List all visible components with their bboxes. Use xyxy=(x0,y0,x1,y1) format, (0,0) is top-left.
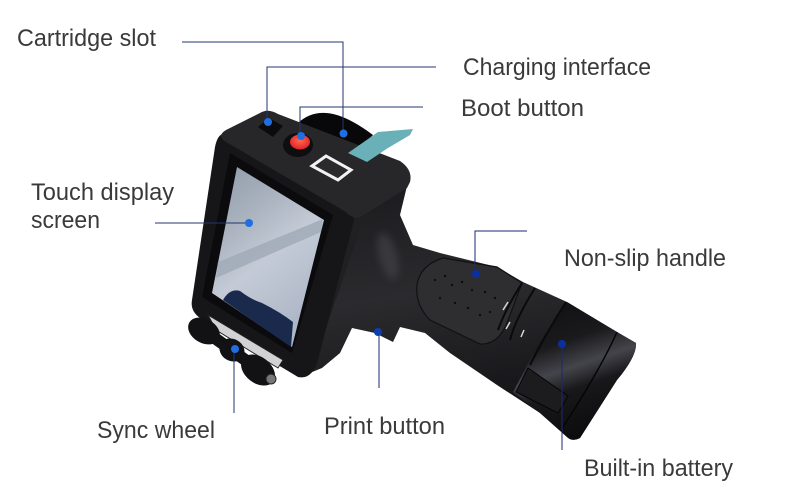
cartridge cover xyxy=(298,113,373,156)
battery xyxy=(513,302,636,440)
leader: touch display screen xyxy=(155,219,253,227)
label: built-in battery: Built-in battery xyxy=(584,455,733,482)
leader: print button xyxy=(374,328,382,388)
label: non-slip handle: Non-slip handle xyxy=(564,245,726,272)
leader: cartridge slot xyxy=(182,42,348,138)
leader: charging interface xyxy=(264,67,436,126)
label: touch display screen: Touch display xyxy=(31,179,174,206)
grip highlight xyxy=(373,230,403,282)
label: print button: Print button xyxy=(324,413,445,440)
label: charging interface: Charging interface xyxy=(463,54,651,81)
label: cartridge slot: Cartridge slot xyxy=(17,25,156,52)
blue cartridge tab xyxy=(348,129,413,162)
ring highlights xyxy=(503,302,524,337)
handle rings xyxy=(498,283,566,365)
screen bezel xyxy=(202,153,333,353)
head side strip xyxy=(300,217,362,377)
sync wheel bracket xyxy=(208,315,283,368)
label: sync wheel: Sync wheel xyxy=(97,417,215,444)
leader: sync wheel xyxy=(231,345,239,413)
boot button base xyxy=(283,133,313,157)
battery ring line xyxy=(563,332,617,427)
device illustration xyxy=(183,111,636,440)
screen dark reflection xyxy=(223,290,293,347)
head front face xyxy=(192,134,354,377)
battery latch xyxy=(516,368,568,413)
screen xyxy=(212,167,324,347)
leader: non-slip handle xyxy=(472,231,527,278)
network port xyxy=(312,156,351,180)
boot button xyxy=(290,134,310,150)
label: touch display screen: screen xyxy=(31,207,100,234)
handle pad xyxy=(417,258,522,344)
sync wheel rollers xyxy=(183,312,281,392)
charging port xyxy=(258,118,283,137)
grip body xyxy=(300,186,636,440)
leader: built-in battery xyxy=(558,340,566,450)
label: boot button: Boot button xyxy=(461,95,584,122)
head top face xyxy=(221,111,411,218)
wheel screw xyxy=(266,374,276,384)
leader: boot button xyxy=(297,107,423,140)
pad grip dots xyxy=(434,275,496,316)
screen diagonal reflection xyxy=(216,219,323,278)
